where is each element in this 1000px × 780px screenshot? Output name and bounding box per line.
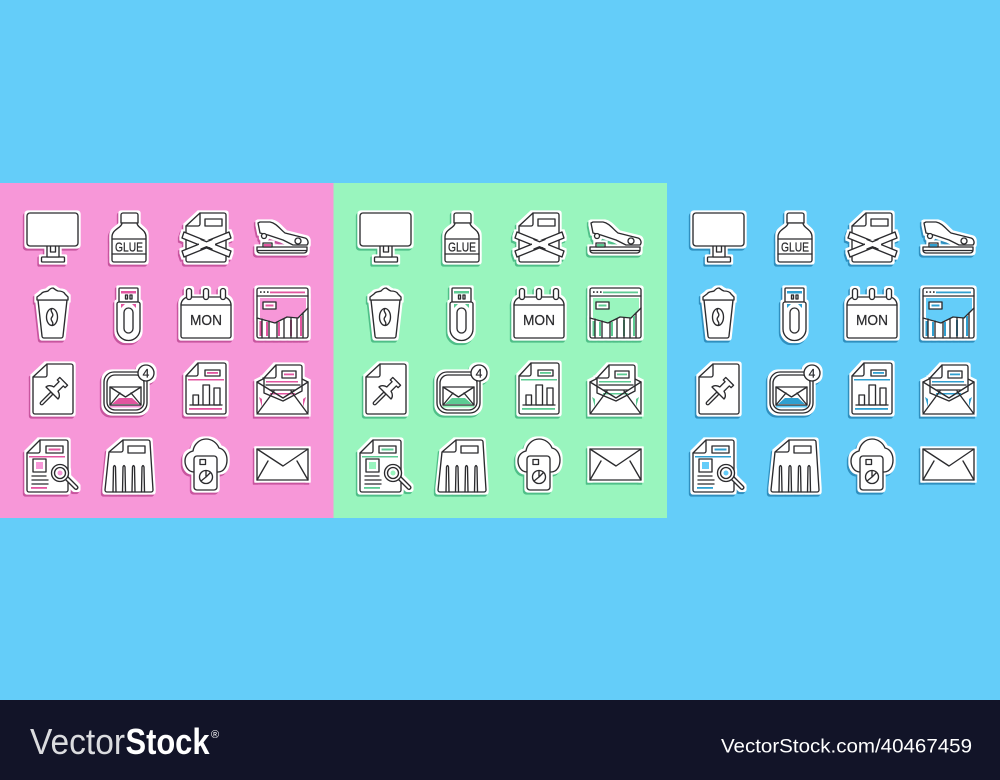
icon: envelope <box>257 449 308 480</box>
icon: stapler <box>590 222 641 253</box>
icon: monitor <box>693 213 744 262</box>
icon: coffee cup <box>703 288 734 338</box>
icon: monitor <box>360 213 411 262</box>
logo: VectorStock <box>30 721 219 762</box>
logo: VectorStock: ® <box>211 729 219 741</box>
icon: document with push pin <box>699 364 739 414</box>
panel: green icon set <box>360 213 641 492</box>
icon: mail notification: 4 <box>143 366 150 380</box>
icon: document search <box>693 440 744 492</box>
icon: monitor <box>27 213 78 262</box>
icon: cloud device <box>851 439 893 490</box>
icon: stapler <box>923 222 974 253</box>
icon: mail notification: 4 <box>809 366 816 380</box>
icon: mail notification <box>104 365 154 413</box>
panel background: green <box>334 183 667 518</box>
icon: coffee cup <box>37 288 68 338</box>
footer banner <box>0 700 1000 780</box>
icon: open envelope with document <box>257 365 308 414</box>
icon: crossed document <box>848 213 897 262</box>
logo: VectorStock: Vector <box>30 721 125 762</box>
icon: open envelope with document <box>923 365 974 414</box>
icon: usb flash drive <box>117 288 140 340</box>
icon: document with push pin <box>33 364 73 414</box>
icon: usb flash drive <box>450 288 473 340</box>
icon: document search <box>360 440 411 492</box>
icon: crossed document <box>515 213 564 262</box>
icon: calendar monday <box>514 288 564 338</box>
icon: cloud device <box>518 439 560 490</box>
icon: usb flash drive <box>783 288 806 340</box>
panel: pink icon set <box>27 213 308 492</box>
icon: browser chart <box>257 288 308 338</box>
icon: mail notification <box>770 365 820 413</box>
panel background: pink <box>0 183 334 518</box>
icon: shredded paper <box>105 440 153 492</box>
icon: browser chart <box>590 288 641 338</box>
icon: document search <box>27 440 78 492</box>
icon: coffee cup <box>370 288 401 338</box>
icon: glue bottle <box>445 213 479 262</box>
icon: mail notification <box>437 365 487 413</box>
icon: glue bottle <box>778 213 812 262</box>
icon: browser chart <box>923 288 974 338</box>
icon: mail notification: 4 <box>476 366 483 380</box>
icon: glue bottle <box>112 213 146 262</box>
icon: shredded paper <box>771 440 819 492</box>
icon: document with push pin <box>366 364 406 414</box>
icon: crossed document <box>182 213 231 262</box>
logo: VectorStock: Stock <box>126 721 210 762</box>
image id text: VectorStock.com/40467459 <box>721 736 972 758</box>
icon: cloud device <box>185 439 227 490</box>
icon: calendar monday: MON <box>190 312 222 329</box>
icon: calendar monday: MON <box>856 312 888 329</box>
icon: glue bottle: GLUE <box>448 240 476 254</box>
icon: calendar monday <box>847 288 897 338</box>
icon: glue bottle: GLUE <box>781 240 809 254</box>
icon: report document <box>186 363 226 414</box>
icon: envelope <box>590 449 641 480</box>
icon: calendar monday <box>181 288 231 338</box>
icon: envelope <box>923 449 974 480</box>
icon: calendar monday: MON <box>523 312 555 329</box>
icon: shredded paper <box>438 440 486 492</box>
icon: report document <box>519 363 559 414</box>
icon: glue bottle: GLUE <box>115 240 143 254</box>
icon: stapler <box>257 222 308 253</box>
icon: report document <box>852 363 892 414</box>
panel: blue icon set <box>693 213 974 492</box>
icon: open envelope with document <box>590 365 641 414</box>
